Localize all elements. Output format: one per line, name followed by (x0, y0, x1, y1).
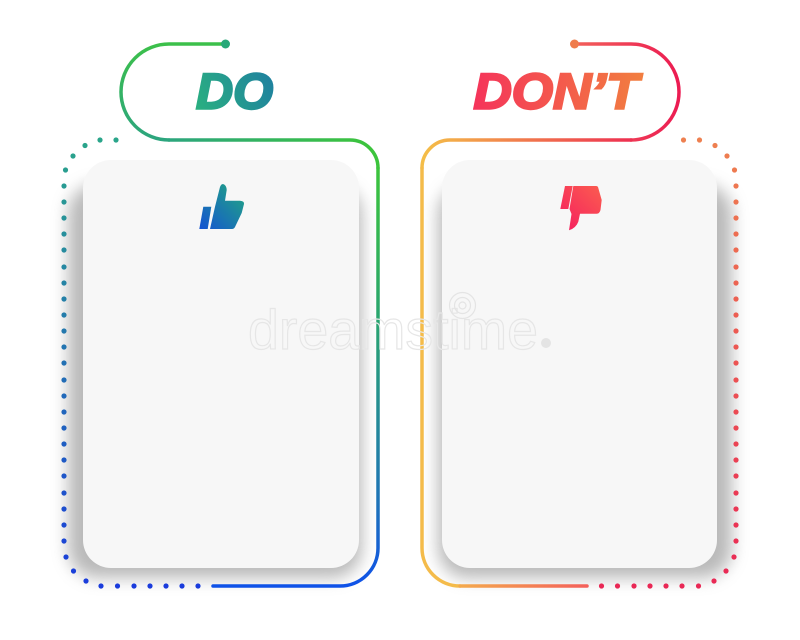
panel: don't (422, 40, 739, 589)
watermark spiral (450, 292, 476, 318)
icon: thumbs up (199, 184, 244, 229)
card shadow: don't (438, 184, 732, 578)
card: do (83, 160, 359, 568)
connector line: do (121, 44, 378, 586)
line end dot: do (221, 40, 230, 48)
dotted line: don't (599, 137, 739, 589)
line end dot: don't (570, 40, 579, 48)
icon: thumbs down (560, 186, 602, 230)
heading: do: DO (196, 64, 273, 120)
dotted line: do (61, 137, 201, 589)
connector line: don't (422, 44, 679, 586)
heading: don't: DON’T (474, 64, 643, 120)
card shadow: do (68, 184, 362, 578)
watermark (248, 292, 551, 361)
card: don't (442, 160, 717, 568)
watermark text: dreamstime (248, 298, 538, 361)
watermark dot (541, 338, 551, 348)
panel: do (61, 40, 378, 589)
